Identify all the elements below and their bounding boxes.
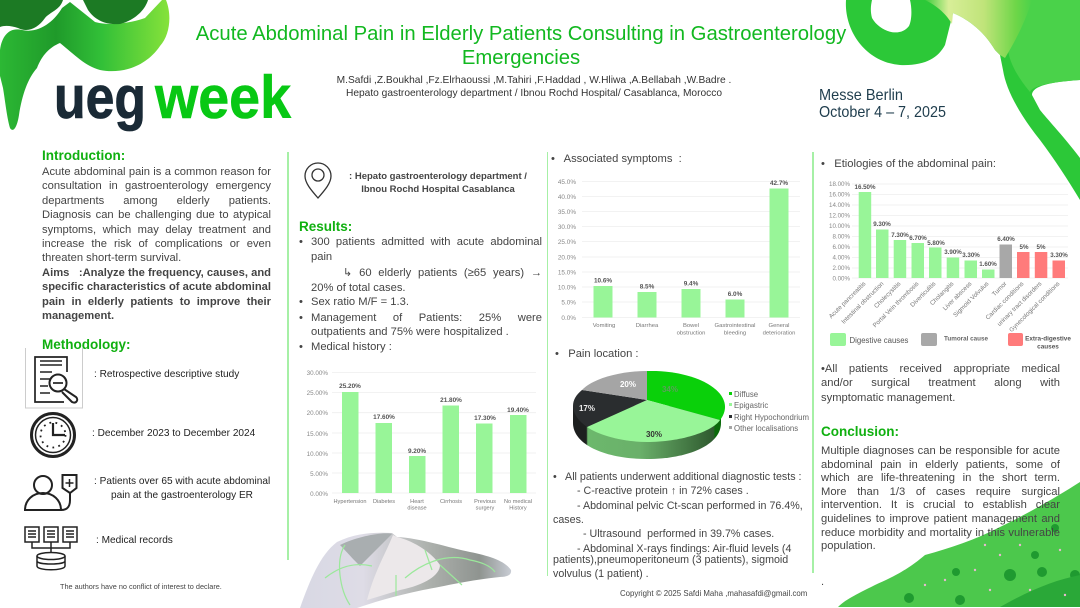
text: data source: : Medical records bbox=[96, 535, 173, 546]
text: conclusion: intervention. It is crucial to establish clear bbox=[821, 499, 1060, 511]
text: introduction and aims: Acute abdominal pain is a common reason for bbox=[42, 166, 271, 178]
bar chart: medical history bbox=[306, 370, 536, 512]
bar chart: etiologies: 6.40% bbox=[997, 236, 1015, 243]
bar chart: medical history: Previous bbox=[474, 499, 496, 505]
text: diagnostic tests: - C-reactive protein ↑ in 72% cases . bbox=[577, 485, 749, 497]
text: diagnostic tests: patients),pneumoperitoneum (3 patients), sigmoid bbox=[553, 554, 788, 566]
bar chart: etiologies: Extra-digestive bbox=[1025, 336, 1071, 342]
text: pain location label: • Pain location : bbox=[555, 348, 639, 360]
bar chart: medical history: 17.30% bbox=[474, 415, 496, 422]
text: copyright: Copyright © 2025 Safdi Maha ,mahasafdi@gmail.com bbox=[620, 589, 807, 598]
text: study location bbox=[349, 171, 527, 195]
text: diagnostic tests: volvulus (1 patient) . bbox=[553, 568, 649, 580]
text: results bullets: Sex ratio M/F = 1.3. bbox=[311, 296, 409, 308]
bar chart: associated symptoms: 15.0% bbox=[558, 270, 576, 276]
text: treatment note: symptomatic management. bbox=[821, 392, 955, 404]
bar chart: etiologies: 1.60% bbox=[979, 261, 997, 268]
bar chart: associated symptoms: 0.0% bbox=[561, 315, 576, 322]
bar chart: etiologies: 3.90% bbox=[944, 249, 962, 256]
text: diagnostic tests bbox=[553, 471, 803, 580]
left snake decoration bbox=[0, 0, 170, 130]
text: diagnostic tests: - Abdominal X-rays findings: Air-fluid levels (4 bbox=[577, 543, 791, 555]
authors and affiliation: M.Safdi ,Z.Boukhal ,Fz.Elrhaoussi ,M.Tahiri ,F.Haddad , W.Hliwa ,A.Bellabah ,W.Badre . bbox=[337, 75, 731, 86]
icon: location pin bbox=[304, 162, 332, 199]
bar chart: etiologies: 9.30% bbox=[873, 221, 891, 228]
text: conclusion: guidelines to improve patient management and bbox=[821, 513, 1060, 525]
text: treatment note bbox=[821, 363, 1060, 404]
title bbox=[196, 23, 846, 69]
text: treatment note: and/or surgical treatment along with bbox=[821, 377, 1060, 389]
bar chart: medical history: Cirrhosis bbox=[440, 499, 462, 505]
venue and date bbox=[819, 87, 946, 121]
text: introduction and aims: consultation in gastroenterology emergency bbox=[42, 180, 271, 192]
text: introduction and aims: increase the risk of complications or even bbox=[42, 238, 271, 250]
bar chart: etiologies: Cardiac conditions bbox=[984, 280, 1025, 321]
pie chart: pain location: 17% bbox=[579, 404, 595, 413]
bar chart: associated symptoms: 20.0% bbox=[558, 254, 576, 262]
bar chart: associated symptoms: 35.0% bbox=[558, 209, 576, 216]
pie chart: pain location: 20% bbox=[620, 380, 636, 389]
bar chart: etiologies: 8.00% bbox=[832, 234, 850, 240]
text: results bullets: • bbox=[299, 296, 303, 308]
pie chart: pain location: Diffuse bbox=[734, 390, 758, 399]
text: introduction and aims: threaten short-term survival. bbox=[42, 252, 181, 264]
text: results bullets: ↳ 60 elderly patients (≥65 years) → bbox=[343, 267, 542, 279]
heading: methodology: Methodology: bbox=[42, 337, 130, 352]
bar chart: etiologies: 4.00% bbox=[832, 254, 850, 262]
text: study period: : December 2023 to December 2024 bbox=[92, 428, 255, 439]
text: results bullets: 20% of total cases. bbox=[311, 282, 406, 294]
bar chart: etiologies: Digestive causes bbox=[850, 336, 909, 345]
bar chart: associated symptoms: 25.0% bbox=[558, 239, 576, 246]
authors and affiliation: Hepato gastroenterology department / Ibnou Rochd Hospital/ Casablanca, Morocco bbox=[346, 88, 722, 99]
text: population: : Patients over 65 with acute abdominal bbox=[94, 476, 270, 487]
bar chart: etiologies: Sigmoid Volvulus bbox=[952, 280, 990, 319]
bar chart: medical history: 25.20% bbox=[339, 383, 361, 390]
text: results bullets: 300 patients admitted with acute abdominal bbox=[311, 236, 542, 248]
bar chart: associated symptoms bbox=[558, 179, 800, 336]
bar chart: associated symptoms: Vomiting bbox=[593, 323, 615, 329]
bar chart: etiologies: Acute pancreatitis bbox=[828, 280, 867, 320]
bar chart: medical history: 30.00% bbox=[307, 370, 328, 377]
text: results bullets: • bbox=[299, 236, 303, 248]
bar chart: etiologies bbox=[828, 181, 1071, 350]
bar chart: medical history: 17.60% bbox=[373, 414, 395, 421]
text: conclusion: Multiple diagnoses can be responsible for acute bbox=[821, 445, 1060, 457]
pie chart: pain location: 34% bbox=[662, 385, 678, 394]
pie chart: pain location: Epigastric bbox=[734, 401, 768, 410]
icon: patient with medical shield bbox=[24, 474, 78, 511]
text: introduction and aims: specific characteristics of acute abdominal bbox=[42, 281, 271, 293]
text: study design: : Retrospective descriptive study bbox=[94, 369, 239, 380]
text: conclusion bbox=[821, 445, 1060, 552]
text: conflict of interest note: The authors have no conflict of interest to declare. bbox=[60, 582, 222, 591]
text: introduction and aims: Diagnosis can be challenging due to atypical bbox=[42, 209, 271, 221]
bar chart: etiologies: causes bbox=[1037, 344, 1059, 350]
bar chart: associated symptoms: General bbox=[769, 323, 789, 329]
text: conclusion: reduce morbidity and mortality in this vulnerable bbox=[821, 527, 1060, 539]
pie chart: pain location: Right Hypochondrium bbox=[734, 413, 809, 422]
icon: medical records database bbox=[24, 526, 78, 570]
text: results bullets: • bbox=[299, 341, 303, 353]
bar chart: etiologies: Portal Vein thrombosis bbox=[872, 280, 920, 329]
column dividers bbox=[287, 152, 288, 560]
bar chart: etiologies: Liver abscess bbox=[942, 280, 973, 312]
text: introduction and aims: departments among elderly patients. bbox=[42, 195, 271, 207]
text: diagnostic tests: - Abdominal pelvic Ct-scan performed in 76.4%, bbox=[577, 500, 803, 512]
bar chart: etiologies: 3.30% bbox=[962, 252, 980, 259]
text: results bullets: • bbox=[299, 312, 303, 324]
bar chart: associated symptoms: 10.0% bbox=[558, 284, 576, 292]
bar chart: etiologies: Gynecological conditions bbox=[1008, 280, 1061, 334]
bar chart: etiologies: 6.70% bbox=[909, 235, 927, 242]
bar chart: medical history: 0.00% bbox=[310, 491, 328, 498]
bar chart: etiologies: 14.00% bbox=[829, 202, 850, 209]
text: introduction and aims: symptoms, which may delay treatment and bbox=[42, 224, 271, 236]
bar chart: etiologies: 10.00% bbox=[829, 223, 850, 230]
bar chart: etiologies: 12.00% bbox=[829, 212, 850, 220]
bar chart: associated symptoms: 40.0% bbox=[558, 194, 576, 201]
bar chart: medical history: 10.00% bbox=[307, 451, 328, 458]
bar chart: medical history: 19.40% bbox=[507, 407, 529, 414]
right snake decoration bbox=[846, 0, 1080, 200]
stray period mark: . bbox=[821, 576, 824, 588]
bar chart: etiologies: Tumoral cause bbox=[944, 336, 988, 342]
text: diagnostic tests: cases. bbox=[553, 514, 584, 526]
bar chart: medical history: 25.00% bbox=[307, 390, 328, 397]
text: treatment note: •All patients received appropriate medical bbox=[821, 363, 1060, 375]
heading: introduction: Introduction: bbox=[42, 148, 125, 163]
pie chart: pain location: Other localisations bbox=[734, 424, 798, 433]
text: study location: : Hepato gastroenterology department / bbox=[349, 171, 527, 182]
text: introduction and aims: pain in elderly patients to improve their bbox=[42, 296, 271, 308]
text: associated symptoms label: • Associated symptoms : bbox=[551, 153, 682, 165]
bar chart: associated symptoms: Diarrhea bbox=[636, 323, 659, 329]
bar chart: etiologies: Intestinal obstruction bbox=[840, 280, 886, 326]
bar chart: etiologies: 6.00% bbox=[832, 244, 850, 251]
bar chart: medical history: Diabetes bbox=[373, 499, 395, 505]
bar chart: associated symptoms: 10.6% bbox=[594, 278, 612, 284]
bar chart: associated symptoms: 6.0% bbox=[728, 291, 743, 298]
bar chart: associated symptoms: 8.5% bbox=[640, 284, 655, 290]
title: Acute Abdominal Pain in Elderly Patients Consulting in Gastroenterology bbox=[196, 23, 846, 45]
authors and affiliation bbox=[337, 75, 731, 99]
bar chart: etiologies: urinary tract disorders bbox=[996, 280, 1043, 328]
bar chart: associated symptoms: 45.0% bbox=[558, 179, 576, 186]
bar chart: associated symptoms: Gastrointestinal bbox=[715, 323, 755, 329]
venue and date: Messe Berlin bbox=[819, 87, 903, 104]
pie chart: pain location: 30% bbox=[646, 430, 662, 439]
bar chart: etiologies: 5% bbox=[1020, 244, 1029, 251]
illustration: liver bbox=[300, 532, 512, 608]
bar chart: medical history: 15.00% bbox=[307, 431, 328, 438]
bar chart: etiologies: 0.00% bbox=[832, 276, 850, 282]
heading: results: Results: bbox=[299, 219, 352, 234]
bar chart: medical history: 20.00% bbox=[307, 410, 328, 417]
bar chart: etiologies: 5% bbox=[1037, 244, 1046, 251]
bar chart: etiologies: Diverticulitis bbox=[909, 280, 937, 309]
title: Emergencies bbox=[462, 47, 580, 69]
logo: ueg week bbox=[54, 68, 292, 132]
text: results bullets: pain bbox=[311, 251, 332, 263]
text: results bullets: Management of Patients: 25% were bbox=[311, 312, 542, 324]
text: introduction and aims: management. bbox=[42, 310, 114, 322]
text: study location: Ibnou Rochd Hospital Casablanca bbox=[361, 184, 515, 195]
text: etiologies label: • Etiologies of the abdominal pain: bbox=[821, 158, 996, 170]
bar chart: medical history: Heart bbox=[410, 499, 424, 505]
icon: clock bbox=[30, 412, 76, 458]
bar chart: medical history: History bbox=[509, 506, 527, 512]
bar chart: etiologies: Tumor bbox=[991, 280, 1008, 298]
text: conclusion: which are life-threatening in the short term. bbox=[821, 472, 1060, 484]
bar chart: medical history: Hypertension bbox=[334, 499, 366, 505]
bar chart: associated symptoms: 42.7% bbox=[770, 180, 788, 187]
bar chart: etiologies: 18.00% bbox=[829, 181, 850, 188]
text: conclusion: population. bbox=[821, 540, 876, 552]
bar chart: medical history: 9.20% bbox=[408, 448, 426, 455]
text: results bullets bbox=[299, 236, 542, 353]
bar chart: associated symptoms: 5.0% bbox=[561, 300, 576, 306]
text: conclusion: More than 1/3 of cases require surgical bbox=[821, 486, 1060, 498]
bar chart: medical history: disease bbox=[407, 506, 427, 512]
bar chart: etiologies: 5.80% bbox=[927, 240, 945, 247]
bar chart: etiologies: Cholecystitis bbox=[873, 280, 902, 310]
bar chart: associated symptoms: 9.4% bbox=[684, 280, 699, 288]
bottom right snake decoration bbox=[838, 482, 1080, 607]
bar chart: etiologies: 16.50% bbox=[854, 184, 876, 191]
bar chart: etiologies: 2.00% bbox=[832, 265, 850, 272]
text: introduction and aims: Aims :Analyze the frequency, causes, and bbox=[42, 267, 271, 279]
text: results bullets: Medical history : bbox=[311, 341, 392, 353]
heading: conclusion: Conclusion: bbox=[821, 424, 899, 439]
bar chart: medical history: No medical bbox=[504, 499, 532, 505]
bar chart: medical history: 5.00% bbox=[310, 471, 328, 478]
bar chart: medical history: 21.80% bbox=[440, 397, 462, 404]
bar chart: etiologies: 16.00% bbox=[829, 192, 850, 198]
text: population bbox=[94, 476, 270, 501]
text: introduction and aims bbox=[42, 166, 271, 322]
icon: document with magnifier bbox=[25, 348, 83, 408]
text: diagnostic tests: • All patients underwent additional diagnostic tests : bbox=[553, 471, 802, 483]
bar chart: etiologies: Cholangitis bbox=[929, 280, 955, 307]
bar chart: etiologies: 7.30% bbox=[891, 232, 909, 239]
text: results bullets: outpatients and 75% were hospitalized . bbox=[311, 326, 509, 338]
text: conclusion: abdominal pain in elderly patients, some of bbox=[821, 459, 1060, 471]
bar chart: medical history: surgery bbox=[476, 506, 495, 512]
text: diagnostic tests: - Ultrasound performed in 39.7% cases. bbox=[583, 528, 774, 540]
text: population: pain at the gastroenterology ER bbox=[111, 490, 253, 501]
bar chart: associated symptoms: 30.0% bbox=[558, 224, 576, 231]
bar chart: etiologies: 3.30% bbox=[1050, 252, 1068, 259]
bar chart: associated symptoms: Bowel bbox=[683, 323, 699, 329]
pie chart: pain location bbox=[573, 371, 809, 459]
